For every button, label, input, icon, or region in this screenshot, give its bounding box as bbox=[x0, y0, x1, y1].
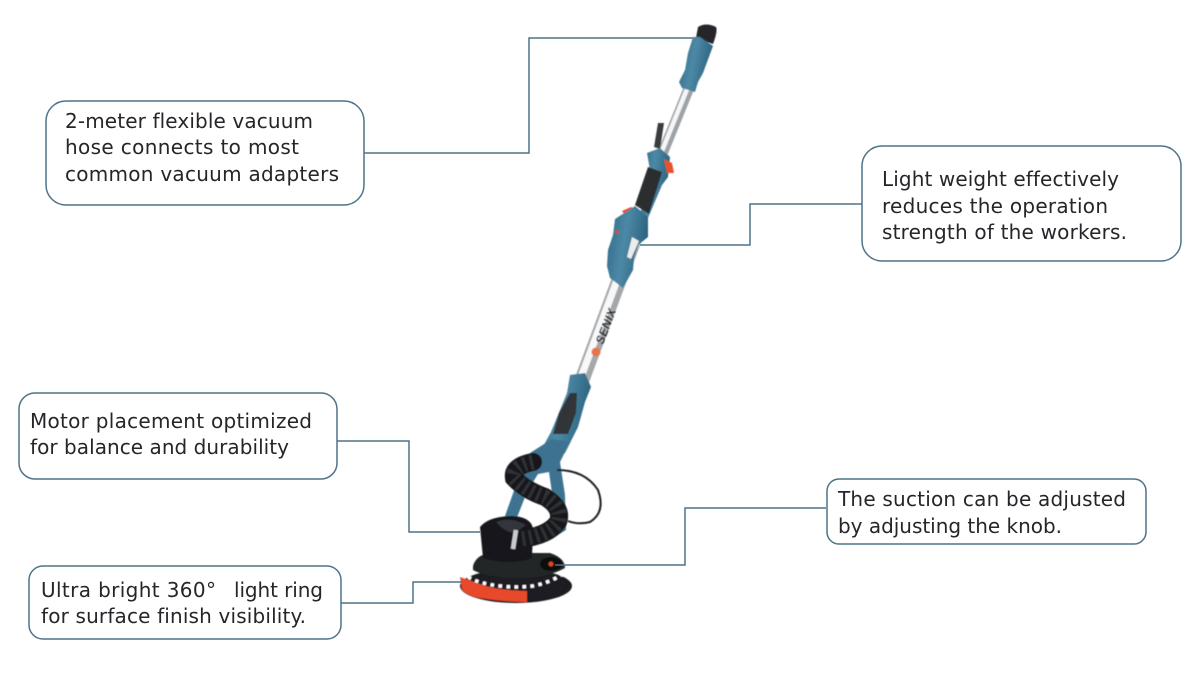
callout: vacuum hose: 2-meter flexible vacuum bbox=[65, 109, 313, 133]
callout: light ring: Ultra bright 360° bbox=[41, 578, 216, 602]
power cord bbox=[557, 470, 601, 523]
callout: light ring: for surface finish visibility. bbox=[41, 604, 306, 628]
sanding disc bbox=[460, 569, 572, 603]
callout: light weight: strength of the workers. bbox=[882, 220, 1127, 244]
callout: light weight bbox=[862, 146, 1181, 261]
orange segment bbox=[460, 577, 527, 602]
callout: vacuum hose: common vacuum adapters bbox=[65, 162, 339, 186]
callout: light weight: Light weight effectively bbox=[882, 167, 1119, 191]
pole window bbox=[627, 237, 639, 259]
motor bbox=[480, 516, 533, 562]
knob bbox=[540, 557, 562, 571]
callout: suction knob: by adjusting the knob. bbox=[838, 514, 1062, 538]
callout: suction knob: The suction can be adjusted bbox=[837, 487, 1126, 511]
callout: vacuum hose: hose connects to most bbox=[65, 135, 299, 159]
lower collar bbox=[540, 373, 591, 458]
middle blue body bbox=[607, 206, 648, 288]
callout: light weight: reduces the operation bbox=[882, 194, 1108, 218]
motor cap detail bbox=[496, 520, 526, 533]
yoke bbox=[505, 439, 570, 540]
leader line: suction bbox=[555, 508, 826, 565]
callout: light ring bbox=[29, 566, 341, 639]
callout: light ring: light ring bbox=[234, 578, 323, 602]
leader line: motor bbox=[337, 441, 480, 532]
black grip bbox=[635, 167, 662, 214]
leader line: hose bbox=[364, 38, 693, 153]
product: drywall sander bbox=[460, 24, 717, 603]
upper pole bbox=[658, 88, 689, 162]
top cap bbox=[696, 24, 717, 44]
callout: motor placement: Motor placement optimized bbox=[30, 409, 312, 433]
black stub bbox=[654, 123, 664, 149]
logo: SENIX bbox=[593, 306, 619, 346]
callout: vacuum hose bbox=[46, 101, 364, 205]
leader line: weight bbox=[640, 204, 862, 245]
orange trigger bbox=[664, 159, 674, 173]
LED ring bbox=[468, 573, 564, 587]
orange button bbox=[622, 207, 635, 215]
platform bbox=[473, 553, 565, 578]
metal clamp bbox=[513, 530, 516, 549]
callout: motor placement: for balance and durability bbox=[30, 435, 289, 459]
lower black grip bbox=[553, 393, 577, 434]
callout: motor placement bbox=[19, 393, 337, 479]
red switch bbox=[615, 230, 619, 234]
leader line: light ring bbox=[341, 582, 462, 603]
upper collar and grip back bbox=[640, 148, 670, 218]
callout: suction knob bbox=[827, 479, 1146, 544]
hose bbox=[514, 462, 559, 539]
lower pole bbox=[577, 240, 634, 388]
top blue grip bbox=[679, 37, 713, 92]
